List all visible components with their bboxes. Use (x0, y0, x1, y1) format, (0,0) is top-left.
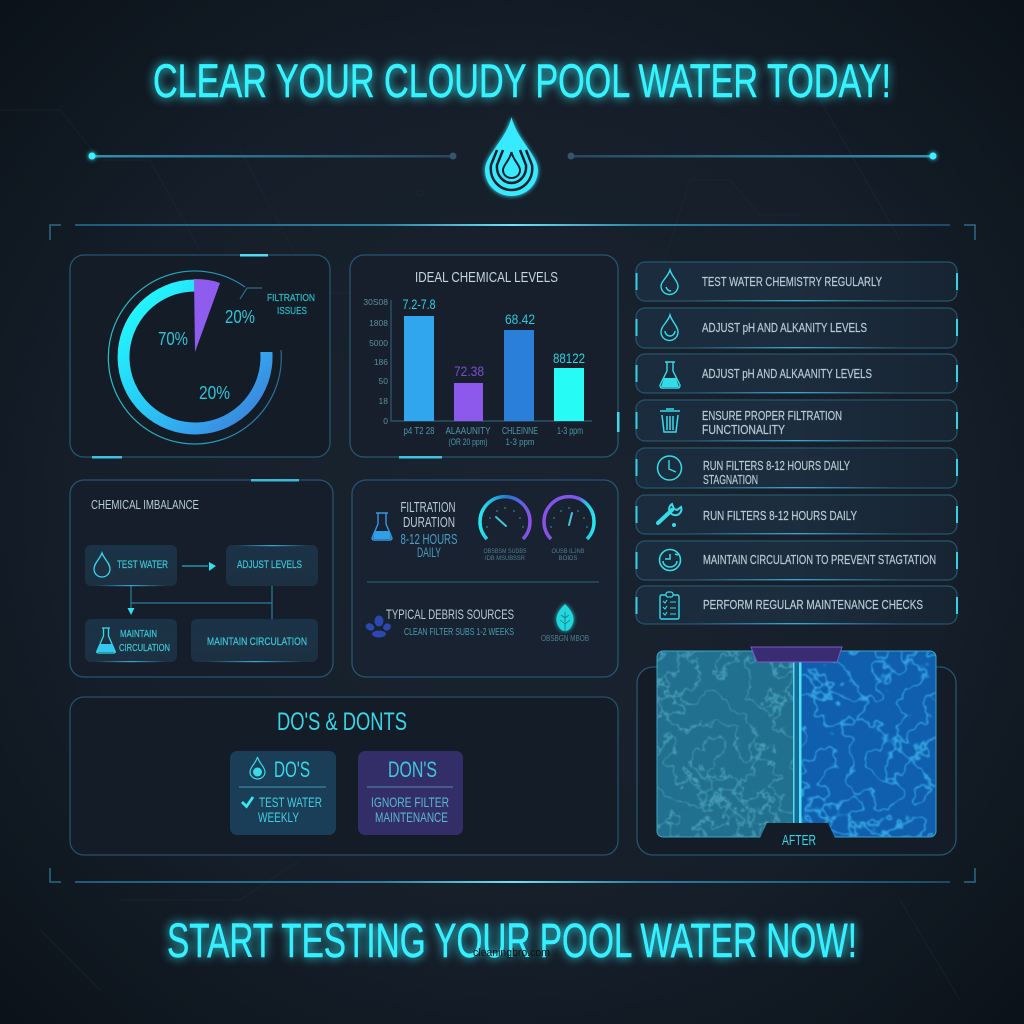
percent labels: 70% (158, 329, 188, 349)
text: filtration duration (400, 500, 458, 560)
watermark: cleaningbro.com (473, 947, 550, 959)
card: do's (230, 751, 336, 835)
checklist row 4: ENSURE PROPER FILTRATION (702, 409, 842, 423)
percent labels: 20% (199, 383, 230, 403)
box: maintain circulation flask: MAINTAIN (120, 628, 157, 640)
icon: water drop emblem (485, 117, 538, 196)
chart title: IDEAL CHEMICAL LEVELS (415, 269, 558, 286)
y axis labels: 1808 (369, 318, 388, 328)
checklist row 3: ADJUST pH AND ALKAANITY LEVELS (702, 367, 872, 381)
text: typical debris sources (386, 606, 514, 638)
panel: chemical imbalance flowchart (70, 479, 333, 677)
checklist row 2: ADJUST pH AND ALKANITY LEVELS (702, 321, 867, 335)
x axis labels: (OR 20 ppm) (448, 437, 488, 447)
arrow: down connector (128, 586, 272, 619)
purple wedge (194, 279, 220, 352)
text: typical debris sources: TYPICAL DEBRIS SOURCES (386, 606, 514, 622)
arrow: right (182, 562, 216, 571)
text: filtration duration: FILTRATION (400, 500, 456, 516)
checklist row 1 (636, 262, 958, 301)
icon: debris paw (364, 616, 392, 638)
y axis labels: 18 (379, 396, 388, 406)
text: filtration duration: DAILY (417, 544, 441, 560)
thin outer ring (108, 271, 281, 444)
axes (391, 300, 592, 421)
panel: do's and don'ts (70, 697, 618, 855)
x axis labels: 1-3 ppm (557, 426, 583, 437)
x axis labels: 1-3 ppm (506, 437, 534, 447)
gauge 2 (544, 497, 594, 562)
panel: filtration duration and debris (352, 480, 618, 677)
panel: pie chart causes (70, 254, 330, 458)
checklist row 7: MAINTAIN CIRCULATION TO PREVENT STAGTATION (703, 553, 936, 567)
x axis labels: p4 T2 28 (404, 426, 435, 437)
y axis labels: 30S08 (363, 297, 388, 307)
box: maintain circulation flask: CIRCULATION (119, 642, 170, 654)
x axis labels: CHLEINNE (502, 426, 538, 437)
gauge 1: OBSBSM SUDBS (484, 548, 527, 555)
card: do's: WEEKLY (258, 809, 299, 825)
gauge 2: OUSB ILJNB (552, 548, 584, 555)
box: adjust levels: ADJUST LEVELS (237, 559, 302, 571)
checklist row 5 (636, 448, 958, 488)
heading: DO'S & DONTS (277, 708, 407, 736)
checklist row 6 (636, 495, 958, 534)
gauge 1: IDB MSUBSSR (485, 556, 526, 562)
checklist row 1: TEST WATER CHEMISTRY REGULARLY (702, 275, 883, 289)
bar values: 88122 (553, 350, 585, 366)
x axis labels: ALAAUNITY (446, 426, 491, 437)
label: filtration issues: FILTRATION (267, 292, 315, 304)
y axis labels (363, 297, 388, 426)
icon: leaf (556, 604, 574, 631)
card: don'ts: MAINTENANCE (375, 809, 448, 825)
checklist row 4: FUNCTIONALITY (702, 423, 786, 437)
bar values: 7.2-7.8 (402, 296, 436, 312)
panel: before and after water comparison (637, 647, 956, 855)
y axis labels: 50 (379, 376, 388, 386)
text: typical debris sources: CLEAN FILTER SUBS 1-2 WEEKS (404, 626, 514, 638)
gauge 2: BOIDS (558, 556, 578, 562)
card: don'ts: DON'S (388, 757, 437, 782)
leader line (240, 288, 262, 299)
water image: before and after (657, 651, 936, 837)
bar values: 68.42 (505, 311, 535, 327)
percent labels (158, 307, 255, 403)
gauge 1 (480, 497, 530, 562)
checklist row 8 (636, 586, 958, 624)
y axis labels: 0 (383, 416, 388, 426)
label: filtration issues: ISSUES (277, 305, 307, 317)
box: test water (85, 545, 177, 586)
x axis labels (404, 426, 583, 447)
card: don'ts (358, 751, 463, 835)
text: filtration duration: 8-12 HOURS (400, 532, 458, 548)
checklist row 4 (636, 400, 958, 441)
checklist row 6: RUN FILTERS 8-12 HOURS DAILY (703, 509, 858, 523)
card: do's: DO'S (274, 757, 310, 782)
panel: ideal chemical levels bar chart (350, 255, 620, 458)
box: maintain circulation: MAINTAIN CIRCULATION (207, 636, 307, 648)
after label tab: AFTER (782, 832, 816, 849)
main frame (50, 224, 975, 883)
after label tab (760, 823, 835, 849)
y axis labels: 186 (374, 357, 388, 367)
bar values (402, 296, 585, 379)
box: adjust levels (226, 545, 318, 586)
bars (404, 316, 434, 421)
checklist row 8: PERFORM REGULAR MAINTENANCE CHECKS (703, 598, 923, 612)
checklist row 7 (636, 541, 958, 580)
top purple tab (751, 647, 842, 662)
header divider right (568, 152, 936, 160)
checklist row 5: STAGNATION (703, 473, 758, 487)
checklist row 5: RUN FILTERS 8-12 HOURS DAILY (703, 459, 850, 473)
box: maintain circulation (191, 619, 318, 662)
checklist row 2 (636, 308, 958, 348)
percent labels: 20% (225, 307, 255, 327)
card: don'ts: IGNORE FILTER (371, 794, 449, 810)
donut arc (118, 280, 273, 434)
text: filtration duration: DURATION (403, 515, 455, 531)
icon: flask (372, 513, 392, 540)
label: filtration issues (267, 292, 315, 317)
header divider left (88, 152, 456, 160)
y axis labels: 5000 (369, 338, 388, 348)
checklist row 3 (636, 354, 958, 393)
panel heading: CHEMICAL IMBALANCE (91, 498, 199, 512)
box: test water: TEST WATER (117, 559, 168, 571)
card: do's: TEST WATER (259, 794, 322, 810)
label: leaf: OBSBGN MBOB (541, 634, 589, 643)
box: maintain circulation flask (85, 619, 177, 662)
bar values: 72.38 (454, 363, 484, 379)
